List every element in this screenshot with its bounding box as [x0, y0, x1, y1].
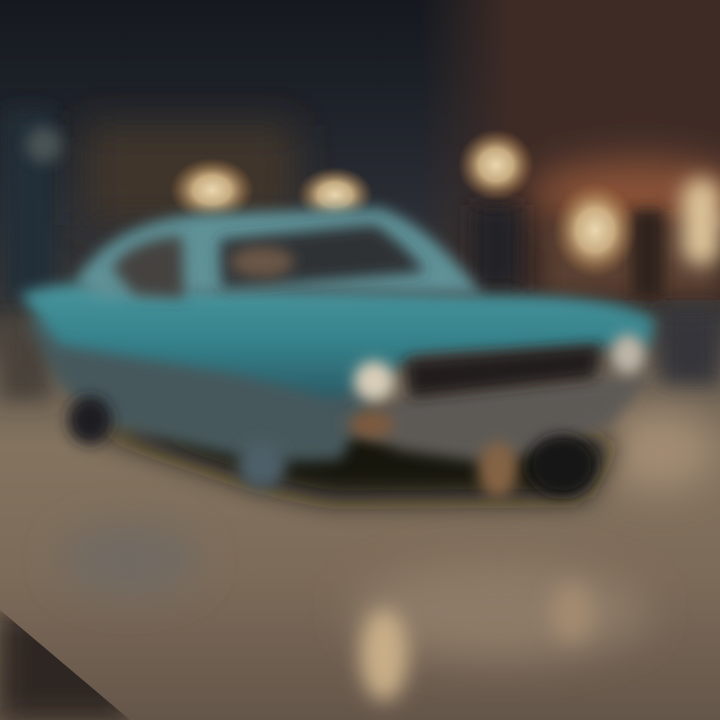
car upper body	[20, 283, 655, 400]
rear window	[112, 236, 184, 298]
wheels	[68, 396, 112, 444]
headlights	[354, 361, 394, 401]
floor: wet reflective ground	[0, 310, 720, 720]
car shadow	[80, 420, 615, 500]
car: teal classic coupe	[20, 208, 655, 500]
street lights	[26, 127, 720, 278]
windshield	[220, 225, 425, 288]
floor reflections of lights	[360, 582, 594, 701]
front bumper	[340, 375, 650, 465]
car lower body	[25, 320, 400, 462]
car roof and pillars	[75, 208, 482, 298]
grille	[405, 345, 600, 398]
